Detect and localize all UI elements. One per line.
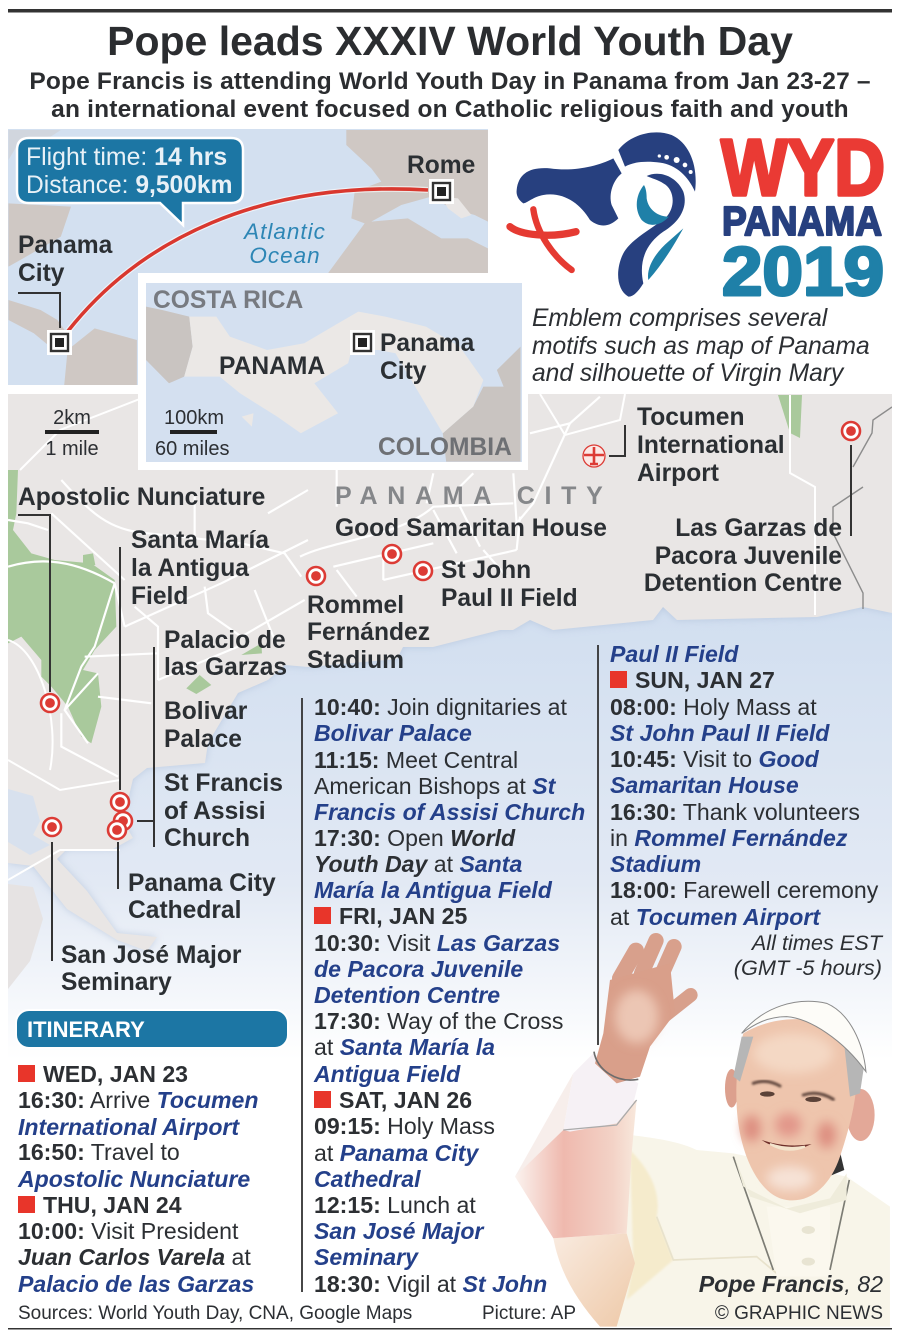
day: Sun Jan 27: Stadium xyxy=(610,851,701,877)
icon: airport xyxy=(583,445,605,467)
labels: venues: International xyxy=(637,432,785,459)
labels: venues: of Assisi xyxy=(164,798,266,825)
day: Sun Jan 27: 16:30: Thank volunteers xyxy=(610,799,860,825)
labels: venues: Seminary xyxy=(61,969,172,996)
labels: venues: Palace xyxy=(164,726,242,753)
text: itinerary column 2 xyxy=(313,694,585,1297)
day: Thu Jan 24 xyxy=(18,1192,254,1297)
text: itinerary column 2: María la Antigua Field xyxy=(314,877,553,903)
text: itinerary column 2: Francis of Assisi Church xyxy=(314,799,585,825)
day: Fri Jan 25: Antigua Field xyxy=(313,1061,461,1087)
day: Sat Jan 26: 12:15: Lunch at xyxy=(314,1192,476,1218)
label: Rome: Rome xyxy=(407,152,475,179)
day: Fri Jan 25: FRI, JAN 25 xyxy=(339,903,467,929)
marker: Panama City xyxy=(47,330,72,355)
labels: venues: Church xyxy=(164,825,250,852)
day: Thu Jan 24: 10:00: Visit President xyxy=(18,1218,239,1244)
label: Panama City inset xyxy=(380,330,475,385)
label: Panama City district: PANAMA CITY xyxy=(335,482,613,510)
marker: Panama City inset xyxy=(350,330,375,355)
labels: venues: Cathedral xyxy=(128,897,241,924)
divider xyxy=(302,645,598,1292)
day: Fri Jan 25: de Pacora Juvenile xyxy=(314,956,523,982)
text: itinerary column 3 xyxy=(610,641,879,930)
text: emblem caption xyxy=(532,305,870,387)
labels: venues: Las Garzas de xyxy=(675,515,842,542)
labels: venues: Paul II Field xyxy=(441,585,578,612)
day: Fri Jan 25: 10:30: Visit Las Garzas xyxy=(314,930,560,956)
logo: WYD emblem xyxy=(510,132,696,297)
title: Pope leads XXXIV World Youth Day xyxy=(107,18,793,64)
scale: city map: 2km xyxy=(53,407,91,429)
text: itinerary column 1 xyxy=(17,1061,258,1297)
picture credit: Picture: AP xyxy=(482,1303,576,1324)
vestments xyxy=(515,1053,890,1327)
labels: venues: Tocumen xyxy=(637,404,744,431)
sources: Sources: World Youth Day, CNA, Google Maps xyxy=(18,1303,412,1324)
callout: flight time and distance xyxy=(17,138,243,225)
day: Wed Jan 23: WED, JAN 23 xyxy=(43,1061,188,1087)
text: itinerary column 2: American Bishops at St xyxy=(314,773,557,799)
day: Sun Jan 27: in Rommel Fernández xyxy=(610,825,848,851)
day: Wed Jan 23 xyxy=(17,1061,258,1192)
label: Panama City xyxy=(18,232,113,287)
subtitle: Pope Francis is attending World Youth Day in Panama from Jan 23-27 – xyxy=(29,68,871,95)
panel: flight route map xyxy=(8,129,488,385)
text: emblem caption: and silhouette of Virgin Mary xyxy=(532,360,845,387)
labels: venues: Fernández xyxy=(307,619,430,646)
markers: venues xyxy=(41,422,860,839)
label: Costa Rica: COSTA RICA xyxy=(153,287,304,314)
labels: venues: Santa María xyxy=(131,527,269,554)
day: Sun Jan 27: Samaritan House xyxy=(610,772,799,798)
leader lines xyxy=(18,425,851,961)
label: Colombia: COLOMBIA xyxy=(378,434,512,461)
day: Sun Jan 27: St John Paul II Field xyxy=(610,720,830,746)
text: emblem caption: motifs such as map of Panama xyxy=(532,333,870,360)
day: Thu Jan 24: Palacio de las Garzas xyxy=(18,1271,254,1297)
day: Wed Jan 23: 16:30: Arrive Tocumen xyxy=(18,1087,258,1113)
day: Fri Jan 25: 17:30: Way of the Cross xyxy=(314,1008,563,1034)
callout: flight time and distance: Distance: 9,500km xyxy=(26,172,232,199)
logo: WYD wordmark: PANAMA xyxy=(722,198,882,244)
scale: inset: 60 miles xyxy=(155,438,229,460)
labels: venues: Panama City xyxy=(128,870,276,897)
text: itinerary column 2: 11:15: Meet Central xyxy=(314,747,518,773)
caption: Pope Francis: Pope Francis, 82 xyxy=(699,1271,883,1297)
note: time zone xyxy=(734,930,884,980)
text: itinerary column 2: Youth Day at Santa xyxy=(314,851,522,877)
day: Sat Jan 26: SAT, JAN 26 xyxy=(339,1087,472,1113)
note: time zone: (GMT -5 hours) xyxy=(734,955,882,980)
day: Thu Jan 24: THU, JAN 24 xyxy=(43,1192,182,1218)
heading: itinerary: ITINERARY xyxy=(27,1017,145,1042)
labels: venues: Field xyxy=(131,583,188,610)
hand xyxy=(594,941,691,1083)
text: itinerary column 2: Bolivar Palace xyxy=(314,720,472,746)
labels: venues: Detention Centre xyxy=(644,570,842,597)
scale: inset: 100km xyxy=(164,407,224,429)
panel: Panama inset map xyxy=(138,275,528,470)
text: itinerary column 3: Paul II Field xyxy=(610,641,739,667)
labels: venues: Rommel xyxy=(307,592,404,619)
label: Panama: PANAMA xyxy=(219,353,325,380)
note: time zone: All times EST xyxy=(750,930,884,955)
day: Fri Jan 25: Detention Centre xyxy=(314,982,500,1008)
label: Panama City: Panama xyxy=(18,232,113,259)
labels: venues: San José Major xyxy=(61,942,242,969)
heading: itinerary xyxy=(16,1010,288,1048)
labels: venues: Apostolic Nunciature xyxy=(18,484,265,511)
day: Sat Jan 26: at Panama City xyxy=(314,1140,479,1166)
label: Atlantic Ocean: Ocean xyxy=(249,243,321,268)
labels: venues: Stadium xyxy=(307,647,404,674)
scale: city map xyxy=(45,407,99,460)
labels: venues xyxy=(18,404,842,996)
day: Sun Jan 27: at Tocumen Airport xyxy=(610,904,821,930)
day: Fri Jan 25: at Santa María la xyxy=(314,1034,495,1060)
day: Sun Jan 27: 18:00: Farewell ceremony xyxy=(610,877,879,903)
text: itinerary column 2: 17:30: Open World xyxy=(314,825,516,851)
day: Fri Jan 25 xyxy=(313,903,563,1087)
subtitle xyxy=(29,68,871,123)
day: Thu Jan 24: Juan Carlos Varela at xyxy=(18,1244,251,1270)
marker: Rome xyxy=(429,179,454,204)
day: Sat Jan 26: San José Major xyxy=(314,1218,485,1244)
day: Sat Jan 26: 18:30: Vigil at St John xyxy=(314,1271,547,1297)
day: Wed Jan 23: 16:50: Travel to xyxy=(18,1139,180,1165)
labels: venues: las Garzas xyxy=(164,654,287,681)
logo: WYD wordmark xyxy=(721,123,885,310)
day: Sat Jan 26: Seminary xyxy=(314,1244,419,1270)
labels: venues: Pacora Juvenile xyxy=(655,543,842,570)
labels: venues: Good Samaritan House xyxy=(335,515,607,542)
subtitle: an international event focused on Catholic religious faith and youth xyxy=(51,96,849,123)
credit: graphic news: © GRAPHIC NEWS xyxy=(715,1303,883,1324)
day: Wed Jan 23: International Airport xyxy=(18,1114,240,1140)
day: Sat Jan 26 xyxy=(314,1087,547,1297)
callout: flight time and distance: Flight time: 14 hrs xyxy=(26,144,227,171)
flight route arc xyxy=(68,189,428,331)
logo: WYD wordmark: 2019 xyxy=(722,233,884,310)
day: Sun Jan 27 xyxy=(610,667,879,930)
day: Sat Jan 26: Cathedral xyxy=(314,1166,421,1192)
label: Atlantic Ocean xyxy=(242,219,326,268)
text: itinerary column 2: 10:40: Join dignitaries at xyxy=(314,694,567,720)
text: emblem caption: Emblem comprises several xyxy=(532,305,829,332)
labels: venues: St John xyxy=(441,557,531,584)
labels: venues: Palacio de xyxy=(164,627,286,654)
labels: venues: St Francis xyxy=(164,770,283,797)
label: Panama City inset: Panama xyxy=(380,330,475,357)
label: Atlantic Ocean: Atlantic xyxy=(242,219,326,244)
label: Panama City inset: City xyxy=(380,358,427,385)
day: Wed Jan 23: Apostolic Nunciature xyxy=(17,1166,250,1192)
label: Panama City: City xyxy=(18,260,65,287)
labels: venues: Bolivar xyxy=(164,698,248,725)
scale: city map: 1 mile xyxy=(45,438,99,460)
day: Sun Jan 27: 08:00: Holy Mass at xyxy=(610,694,817,720)
head xyxy=(725,1001,875,1213)
day: Sat Jan 26: 09:15: Holy Mass xyxy=(314,1113,495,1139)
labels: venues: la Antigua xyxy=(131,555,249,582)
day: Sun Jan 27: 10:45: Visit to Good xyxy=(610,746,820,772)
labels: venues: Airport xyxy=(637,460,719,487)
panel: city map xyxy=(8,394,892,1012)
scale: inset xyxy=(155,407,229,460)
photo: Pope Francis xyxy=(515,941,890,1327)
day: Sun Jan 27: SUN, JAN 27 xyxy=(635,667,775,693)
